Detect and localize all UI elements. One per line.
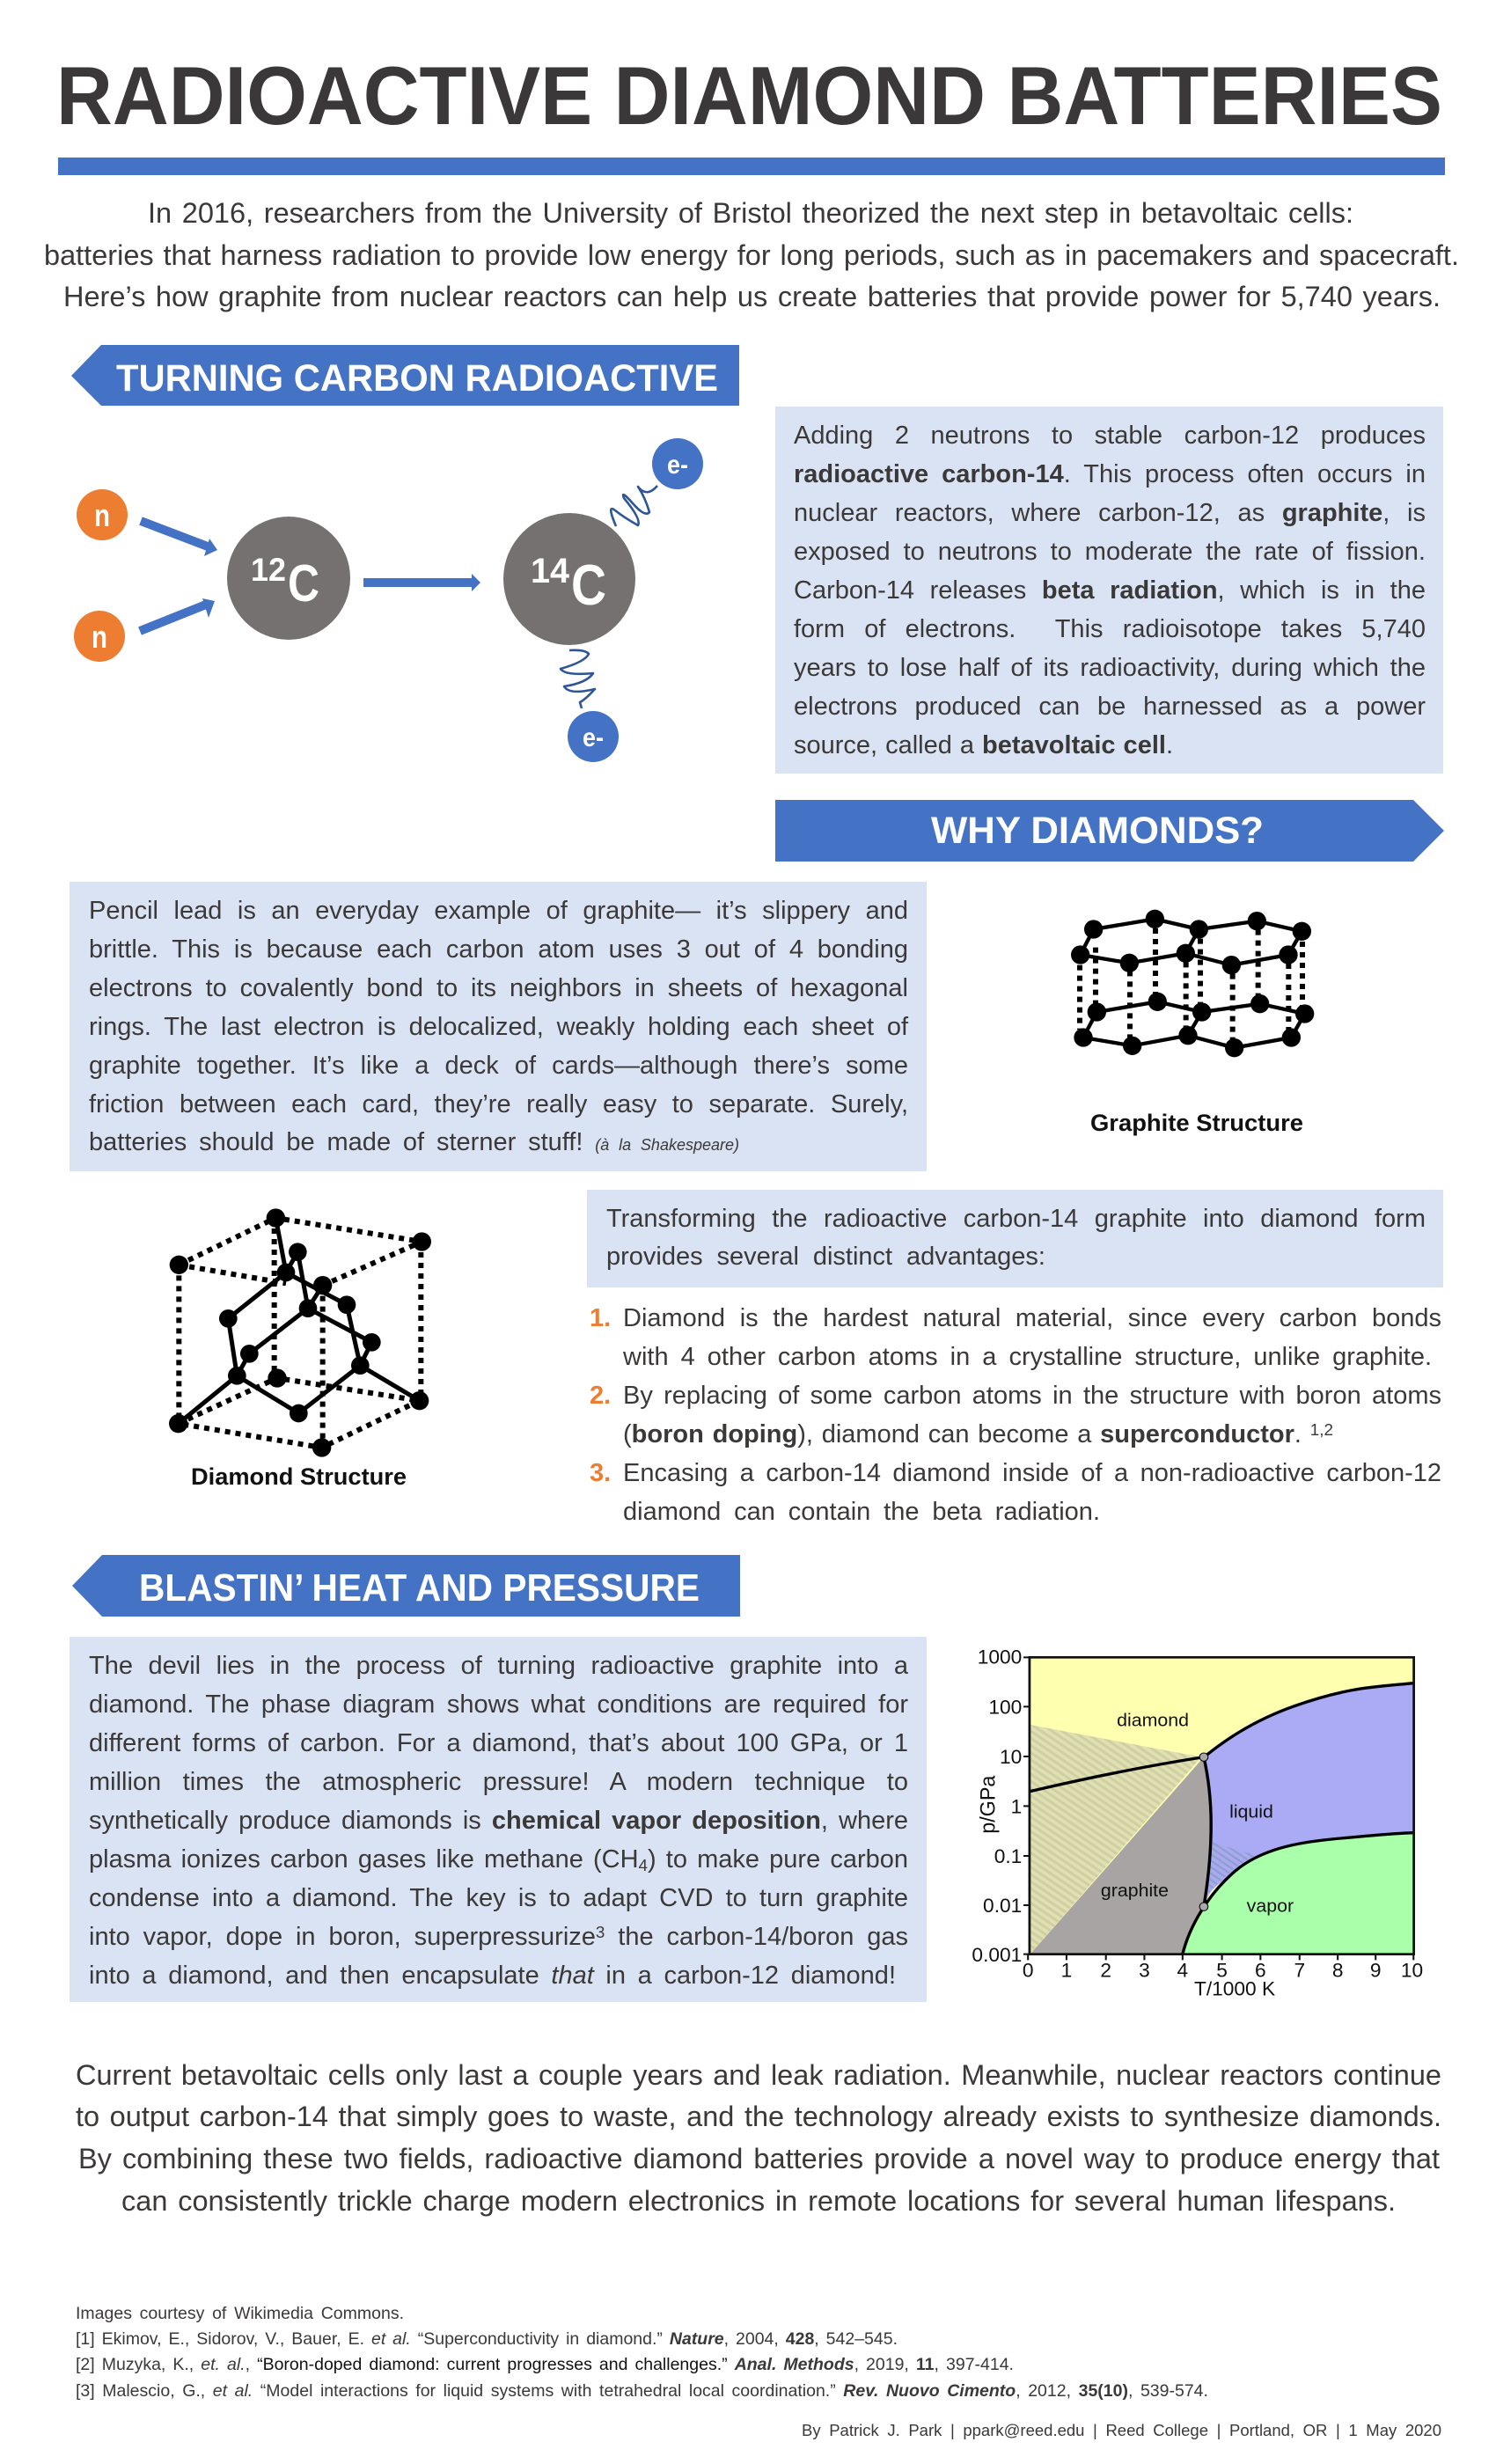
diagram: carbon-12 to carbon-14: [74, 438, 703, 762]
chart: carbon phase diagram: 2: [1100, 1960, 1111, 1982]
numbered list: advantages: 3.: [590, 1459, 611, 1487]
panel: graphite explanation: graphite together. It’s like a deck of cards—although there’s some: [89, 1052, 908, 1080]
panel: graphite explanation: batteries should be made of sterner stuff! (à la Shakespeare): [89, 1128, 739, 1156]
closing paragraph: By combining these two fields, radioactive diamond batteries provide a novel way to produce energy that: [78, 2143, 1440, 2174]
panel: heat and pressure explanation: into vapor, dope in boron, superpressurize3 the carbon-14/boron gas: [89, 1923, 908, 1951]
numbered list: advantages: By replacing of some carbon atoms in the structure with boron atoms: [623, 1382, 1441, 1410]
numbered list: advantages: diamond can contain the beta radiation.: [623, 1498, 1100, 1526]
panel: heat and pressure explanation: into a diamond, and then encapsulate that in a carbon-12 diamond!: [89, 1962, 896, 1990]
beta wave bottom: [561, 650, 595, 708]
panel: graphite explanation: friction between each card, they’re really easy to separate. Surely,: [89, 1090, 908, 1118]
electron top: e-: [667, 451, 688, 480]
heading: why diamonds: WHY DIAMONDS?: [931, 810, 1264, 852]
panel: advantages intro: Transforming the radioactive carbon-14 graphite into diamond form: [606, 1205, 1426, 1233]
neutron 2: n: [92, 619, 107, 655]
panel: heat and pressure explanation: plasma ionizes carbon gases like methane (CH4) to make pure carbon: [89, 1845, 908, 1874]
panel: carbon-14 explanation: source, called a betavoltaic cell.: [794, 731, 1173, 759]
panel: carbon-14 explanation: exposed to neutrons to moderate the rate of fission.: [794, 538, 1426, 566]
chart: carbon phase diagram: 1000: [978, 1646, 1022, 1668]
panel: heat and pressure explanation: [70, 1637, 927, 2002]
chart: carbon phase diagram: 4: [1177, 1960, 1188, 1982]
intro paragraph: In 2016, researchers from the University of Bristol theorized the next step in betavoltaic cells:: [148, 197, 1353, 229]
panel: graphite explanation: electrons to covalently bond to its neighbors in sheets of hexagonal: [89, 974, 908, 1002]
panel: graphite explanation: brittle. This is because each carbon atom uses 3 out of 4 bonding: [89, 935, 908, 964]
closing paragraph: [76, 2059, 1441, 2217]
panel: carbon-14 explanation: radioactive carbon-14. This process often occurs in: [794, 460, 1426, 488]
references: Images courtesy of Wikimedia Commons.: [76, 2304, 404, 2323]
panel: graphite explanation: [70, 882, 927, 1171]
carbon-12 atom: C: [288, 554, 319, 612]
chart: carbon phase diagram: 10: [1401, 1960, 1423, 1982]
diagram: diamond structure: Diamond Structure: [191, 1463, 407, 1490]
numbered list: advantages: Encasing a carbon-14 diamond inside of a non-radioactive carbon-12: [623, 1459, 1441, 1487]
chart: carbon phase diagram: 0: [1023, 1960, 1034, 1982]
numbered list: advantages: Diamond is the hardest natural material, since every carbon bonds: [623, 1304, 1441, 1332]
heading: turning carbon radioactive: TURNING CARBON RADIOACTIVE: [116, 357, 718, 400]
carbon-14 atom: C: [571, 553, 606, 617]
panel: graphite explanation: rings. The last electron is delocalized, weakly holding each sheet of: [89, 1013, 908, 1041]
title underline bar: [58, 158, 1445, 175]
neutron 1: n: [94, 497, 110, 533]
panel: heat and pressure explanation: synthetically produce diamonds is chemical vapor deposition, where: [89, 1807, 908, 1835]
diagram: graphite structure: Graphite Structure: [1090, 1110, 1303, 1136]
panel: carbon-14 explanation: [775, 407, 1443, 774]
closing paragraph: Current betavoltaic cells only last a couple years and leak radiation. Meanwhile, nuclear reactors continue: [76, 2059, 1441, 2091]
chart: carbon phase diagram: 100: [988, 1697, 1022, 1718]
electron bottom: e-: [583, 723, 604, 752]
numbered list: advantages: (boron doping), diamond can become a superconductor. 1,2: [623, 1420, 1333, 1448]
panel: carbon-14 explanation: Adding 2 neutrons to stable carbon-12 produces: [794, 422, 1426, 450]
references: [2] Muzyka, K., et. al., “Boron-doped diamond: current progresses and challenges.” Anal. Methods, 2019, 11, 397-414.: [76, 2355, 1014, 2374]
carbon-12 atom: [227, 517, 350, 640]
references: [3] Malescio, G., et al. “Model interactions for liquid systems with tetrahedral local coordination.” Rev. Nuovo Cimento, 2012, 35(10), 539-574.: [76, 2381, 1208, 2401]
panel: heat and pressure explanation: million times the atmospheric pressure! A modern technique to: [89, 1768, 908, 1796]
numbered list: advantages: [590, 1304, 1441, 1526]
electron top: [652, 438, 703, 489]
references: [1] Ekimov, E., Sidorov, V., Bauer, E. et al. “Superconductivity in diamond.” Nature, 2004, 428, 542–545.: [76, 2329, 898, 2349]
electron bottom: [568, 711, 619, 762]
panel: heat and pressure explanation: diamond. The phase diagram shows what conditions are required for: [89, 1690, 908, 1719]
carbon-12 atom: 12: [251, 552, 286, 588]
numbered list: advantages: 1.: [590, 1304, 611, 1332]
panel: carbon-14 explanation: years to lose half of its radioactivity, during which the: [794, 654, 1426, 682]
closing paragraph: can consistently trickle charge modern electronics in remote locations for several human lifespans.: [121, 2185, 1396, 2217]
intro paragraph: Here’s how graphite from nuclear reactors can help us create batteries that provide power for 5,740 years.: [63, 281, 1441, 312]
panel: advantages intro: [587, 1190, 1443, 1287]
beta wave top: [611, 486, 657, 526]
panel: heat and pressure explanation: The devil lies in the process of turning radioactive graphite into a: [89, 1652, 908, 1680]
chart: carbon phase diagram: vapor: [1247, 1896, 1294, 1917]
title: RADIOACTIVE DIAMOND BATTERIES: [56, 49, 1442, 142]
closing paragraph: to output carbon-14 that simply goes to waste, and the technology already exists to synthesize diamonds.: [76, 2101, 1441, 2132]
chart: carbon phase diagram: 3: [1139, 1960, 1150, 1982]
chart: carbon phase diagram: 1: [1011, 1796, 1022, 1817]
panel: heat and pressure explanation: condense into a diamond. The key is to adapt CVD to turn graphite: [89, 1884, 908, 1912]
panel: carbon-14 explanation: nuclear reactors, where carbon-12, as graphite, is: [794, 499, 1426, 527]
heading: turning carbon radioactive: [71, 345, 739, 406]
intro paragraph: [44, 197, 1459, 312]
panel: carbon-14 explanation: form of electrons. This radioisotope takes 5,740: [794, 615, 1426, 643]
references: [76, 2304, 1208, 2401]
carbon-14 atom: 14: [531, 552, 570, 590]
chart: carbon phase diagram: diamond: [1117, 1711, 1189, 1731]
arrow: carbon-12 to carbon-14: [363, 574, 480, 591]
chart: carbon phase diagram: graphite: [1101, 1881, 1169, 1901]
panel: advantages intro: provides several distinct advantages:: [606, 1243, 1045, 1271]
numbered list: advantages: with 4 other carbon atoms in a crystalline structure, unlike graphite.: [623, 1343, 1432, 1371]
chart: carbon phase diagram: T/1000 K: [1194, 1978, 1275, 1999]
neutron 2: [74, 611, 125, 662]
panel: carbon-14 explanation: electrons produced can be harnessed as a power: [794, 693, 1426, 721]
numbered list: advantages: 2.: [590, 1382, 611, 1410]
carbon-14 atom: [503, 513, 635, 645]
heading: blastin' heat and pressure: [72, 1555, 740, 1617]
chart: carbon phase diagram: liquid: [1229, 1802, 1273, 1822]
arrow: neutron 2 to carbon-12: [140, 598, 215, 631]
panel: graphite explanation: Pencil lead is an everyday example of graphite— it’s slippery and: [89, 897, 908, 925]
chart: carbon phase diagram: 0.001: [972, 1944, 1022, 1966]
panel: heat and pressure explanation: different forms of carbon. For a diamond, that’s about 100 GPa, or 1: [89, 1729, 908, 1757]
chart: carbon phase diagram: 5: [1216, 1960, 1228, 1982]
chart: carbon phase diagram: p/GPa: [977, 1775, 1000, 1834]
arrow: neutron 1 to carbon-12: [141, 521, 217, 556]
chart: carbon phase diagram: 7: [1294, 1960, 1305, 1982]
chart: carbon phase diagram: 0.01: [983, 1895, 1022, 1917]
heading: why diamonds: [775, 800, 1444, 862]
chart: carbon phase diagram: 1: [1061, 1960, 1072, 1982]
chart: carbon phase diagram: 8: [1332, 1960, 1343, 1982]
author byline: By Patrick J. Park | ppark@reed.edu | Reed College | Portland, OR | 1 May 2020: [802, 2421, 1441, 2439]
chart: carbon phase diagram: 10: [1000, 1746, 1022, 1768]
neutron 1: [77, 489, 128, 540]
chart: carbon phase diagram: [972, 1646, 1423, 1999]
diagram: graphite structure: [1071, 910, 1314, 1136]
chart: carbon phase diagram: 0.1: [994, 1845, 1022, 1867]
diagram: diamond structure: [169, 1208, 431, 1490]
heading: blastin' heat and pressure: BLASTIN’ HEAT AND PRESSURE: [139, 1566, 700, 1610]
chart: carbon phase diagram: 9: [1370, 1960, 1382, 1982]
intro paragraph: batteries that harness radiation to provide low energy for long periods, such as in pacemakers and spacecraft.: [44, 239, 1459, 271]
panel: carbon-14 explanation: Carbon-14 releases beta radiation, which is in the: [794, 576, 1426, 605]
chart: carbon phase diagram: 6: [1255, 1960, 1266, 1982]
